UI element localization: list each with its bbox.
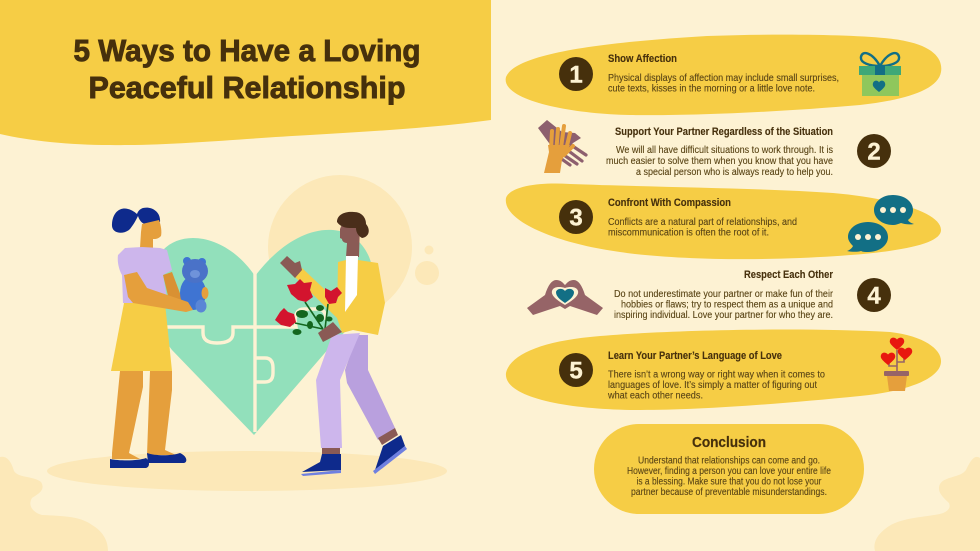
body: hobbies or flaws; try to respect them as a unique and xyxy=(621,300,833,310)
body: We will all have difficult situations to work through. It is xyxy=(616,145,833,156)
icon: gift xyxy=(859,53,901,96)
heading: Respect Each Other xyxy=(744,269,834,281)
pill xyxy=(594,424,864,514)
legs xyxy=(112,371,176,459)
number 2 xyxy=(857,134,891,168)
heading: Learn Your Partner’s Language of Love xyxy=(608,350,782,362)
heading: Show Affection xyxy=(608,53,677,65)
hair xyxy=(112,208,160,233)
step 3 panel xyxy=(506,184,941,259)
conclusion panel xyxy=(594,424,864,514)
roses xyxy=(275,279,342,335)
number 5 xyxy=(559,353,593,387)
body: cute texts, kisses in the morning or a little love note. xyxy=(608,84,815,94)
body xyxy=(608,217,797,238)
icon: holding hands xyxy=(538,120,586,173)
title xyxy=(74,33,420,105)
ankles xyxy=(322,428,398,454)
heading: Conclusion xyxy=(692,434,766,451)
body xyxy=(608,73,839,94)
body: much easier to solve them when you know that you have xyxy=(606,156,833,167)
blob xyxy=(506,35,941,115)
body: However, finding a person you can love your entire life xyxy=(627,466,831,477)
heading: Confront With Compassion xyxy=(608,197,731,209)
blob xyxy=(506,184,941,259)
ground shadow xyxy=(47,451,447,491)
body: a special person who is always ready to help you. xyxy=(636,167,833,178)
body: miscommunication is often the root of it. xyxy=(608,228,769,238)
face and neck xyxy=(140,220,161,250)
number 3: 3 xyxy=(569,204,583,232)
skirt xyxy=(111,303,172,371)
blob xyxy=(506,330,941,410)
number 3 xyxy=(559,200,593,234)
front arm xyxy=(124,272,193,312)
small bubbles xyxy=(415,246,439,285)
title: 5 Ways to Have a Loving xyxy=(74,33,420,68)
body: Physical displays of affection may include small surprises, xyxy=(608,73,839,84)
number 2: 2 xyxy=(867,138,881,166)
number 4 xyxy=(857,278,891,312)
puzzle heart xyxy=(153,230,373,435)
step 2 panel xyxy=(538,120,891,178)
number 5: 5 xyxy=(569,358,583,384)
number 1: 1 xyxy=(569,62,583,88)
title banner xyxy=(0,0,491,145)
body: what each other needs. xyxy=(607,390,703,402)
raised hand xyxy=(280,256,302,278)
step 4 panel xyxy=(527,269,891,321)
body xyxy=(614,289,834,321)
corner blob: bottom right xyxy=(874,457,980,551)
icon: speech bubbles xyxy=(847,195,914,252)
body: languages of love. It’s simply a matter of figuring out xyxy=(608,380,817,391)
body: Conflicts are a natural part of relationships, and xyxy=(608,217,797,228)
body xyxy=(627,456,831,498)
number 4: 4 xyxy=(867,282,881,310)
backdrop circle xyxy=(268,175,412,319)
body xyxy=(607,370,825,402)
body: is a blessing. Make sure that you do not lose your xyxy=(636,476,822,488)
front trouser leg xyxy=(316,333,360,448)
corner blob: bottom left xyxy=(0,457,108,551)
step 5 panel xyxy=(506,330,941,410)
back arm xyxy=(163,272,181,304)
body: inspiring individual. Love your partner for who they are. xyxy=(614,310,833,321)
man xyxy=(275,212,407,476)
step 1 panel xyxy=(506,35,941,115)
woman xyxy=(110,208,208,468)
sleeve xyxy=(295,268,338,318)
shoes xyxy=(301,435,407,476)
body: There isn’t a wrong way or right way when it comes to xyxy=(608,370,825,380)
hand on bear xyxy=(202,287,208,299)
holding hand xyxy=(318,322,342,342)
title: Peaceful Relationship xyxy=(88,70,406,105)
body: Understand that relationships can come and go. xyxy=(638,456,820,466)
jacket xyxy=(337,260,385,335)
icon: heart hands xyxy=(527,280,603,315)
shoes xyxy=(110,453,186,468)
illustration: couple with puzzle heart xyxy=(47,175,447,491)
body: Do not underestimate your partner or make fun of their xyxy=(614,289,834,300)
body xyxy=(606,145,833,178)
body: partner because of preventable misunderstandings. xyxy=(631,487,827,498)
shirt xyxy=(345,256,358,312)
top xyxy=(118,247,172,303)
teddy bear xyxy=(180,257,208,312)
neck and face xyxy=(340,222,360,257)
back trouser leg xyxy=(345,335,395,440)
icon: heart plant xyxy=(881,338,912,391)
heading: Support Your Partner Regardless of the Situation xyxy=(615,126,833,138)
hair xyxy=(337,212,369,238)
number 1 xyxy=(559,57,593,91)
